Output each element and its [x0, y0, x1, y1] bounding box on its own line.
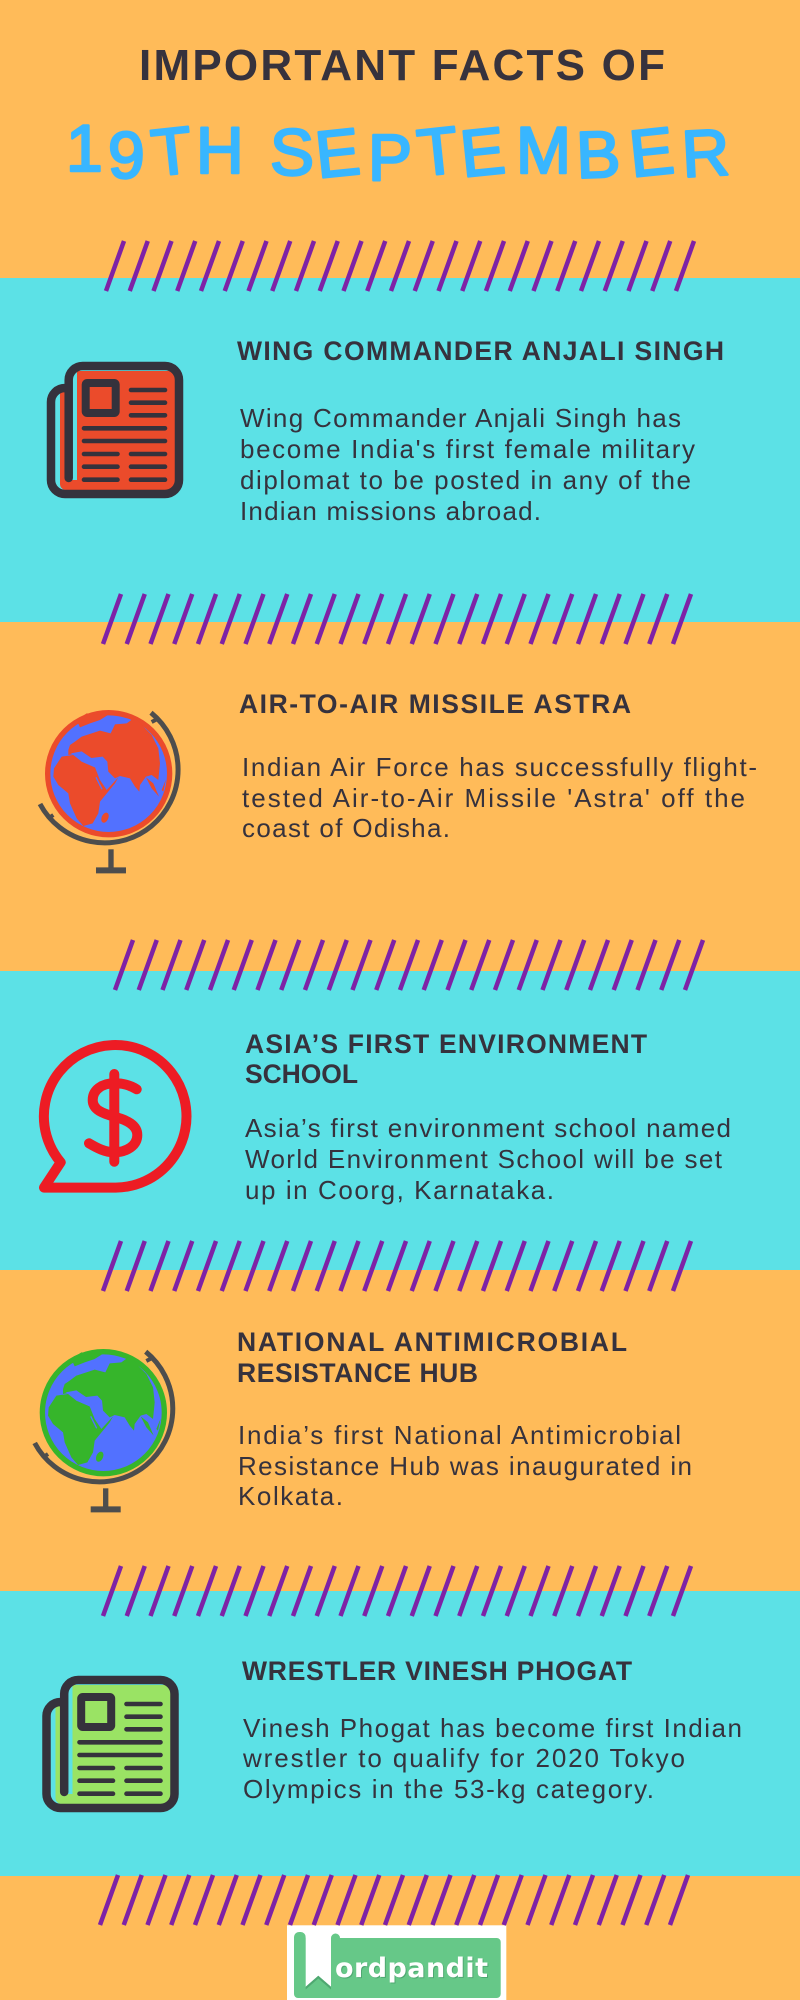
body text: Olympics in the 53-kg category. — [243, 1774, 654, 1804]
body text: become India's first female military — [240, 434, 695, 464]
body text: Vinesh Phogat has become first Indian — [243, 1713, 742, 1743]
body text: Asia’s first environment school named — [245, 1113, 731, 1143]
panel: wrestler vinesh phogat — [0, 1591, 800, 1876]
icon: green newspaper — [46, 1680, 174, 1808]
icon: dollar speech bubble — [44, 1045, 186, 1188]
body text: India’s first National Antimicrobial — [238, 1420, 681, 1450]
body text: Indian missions abroad. — [240, 496, 541, 526]
body text — [242, 752, 757, 843]
body text: World Environment School will be set — [245, 1144, 723, 1174]
panel: national antimicrobial resistance hub — [0, 1270, 800, 1591]
heading — [237, 1327, 627, 1388]
hatch strip 4 — [103, 1241, 691, 1291]
heading: ASIA’S FIRST ENVIRONMENT — [245, 1029, 647, 1059]
heading: WRESTLER VINESH PHOGAT — [242, 1656, 632, 1686]
body text: Indian Air Force has successfully flight- — [242, 752, 757, 782]
body text — [240, 403, 695, 526]
title line: 19th September: 19TH SEPTEMBER — [66, 111, 731, 194]
icon: globe with red land — [40, 713, 178, 870]
logo: wordpandit — [287, 1925, 506, 2000]
heading — [245, 1029, 647, 1089]
hatch strip 2 — [103, 594, 691, 644]
body text: coast of Odisha. — [242, 813, 450, 843]
body text: Kolkata. — [238, 1481, 343, 1511]
panel: footer — [0, 1876, 800, 2000]
panel: asia's first environment school — [0, 971, 800, 1270]
panel: wing commander anjali singh — [0, 278, 800, 622]
title line: important facts of: IMPORTANT FACTS OF — [139, 41, 665, 90]
hatch strip 6 — [100, 1875, 688, 1925]
body text: diplomat to be posted in any of the — [240, 465, 691, 495]
body text — [245, 1113, 731, 1205]
panel: header — [0, 0, 800, 278]
heading: RESISTANCE HUB — [237, 1358, 478, 1388]
panel: air-to-air missile astra — [0, 622, 800, 971]
body text: wrestler to qualify for 2020 Tokyo — [242, 1743, 685, 1773]
heading: NATIONAL ANTIMICROBIAL — [237, 1327, 627, 1357]
body text — [242, 1713, 742, 1804]
icon: red newspaper — [51, 366, 179, 494]
hatch strip 5 — [103, 1566, 691, 1616]
heading: AIR-TO-AIR MISSILE ASTRA — [239, 689, 631, 719]
body text: up in Coorg, Karnataka. — [245, 1175, 554, 1205]
body text: Wing Commander Anjali Singh has — [240, 403, 681, 433]
heading: SCHOOL — [245, 1059, 358, 1089]
icon: globe with green land — [35, 1352, 173, 1509]
body text: tested Air-to-Air Missile 'Astra' off the — [242, 783, 745, 813]
body text — [238, 1420, 692, 1511]
hatch strip 1 — [106, 241, 694, 291]
heading: WING COMMANDER ANJALI SINGH — [237, 336, 724, 366]
body text: Resistance Hub was inaugurated in — [238, 1451, 692, 1481]
logo: wordpandit: ordpandit — [335, 1953, 488, 1984]
hatch strip 3 — [115, 940, 703, 990]
